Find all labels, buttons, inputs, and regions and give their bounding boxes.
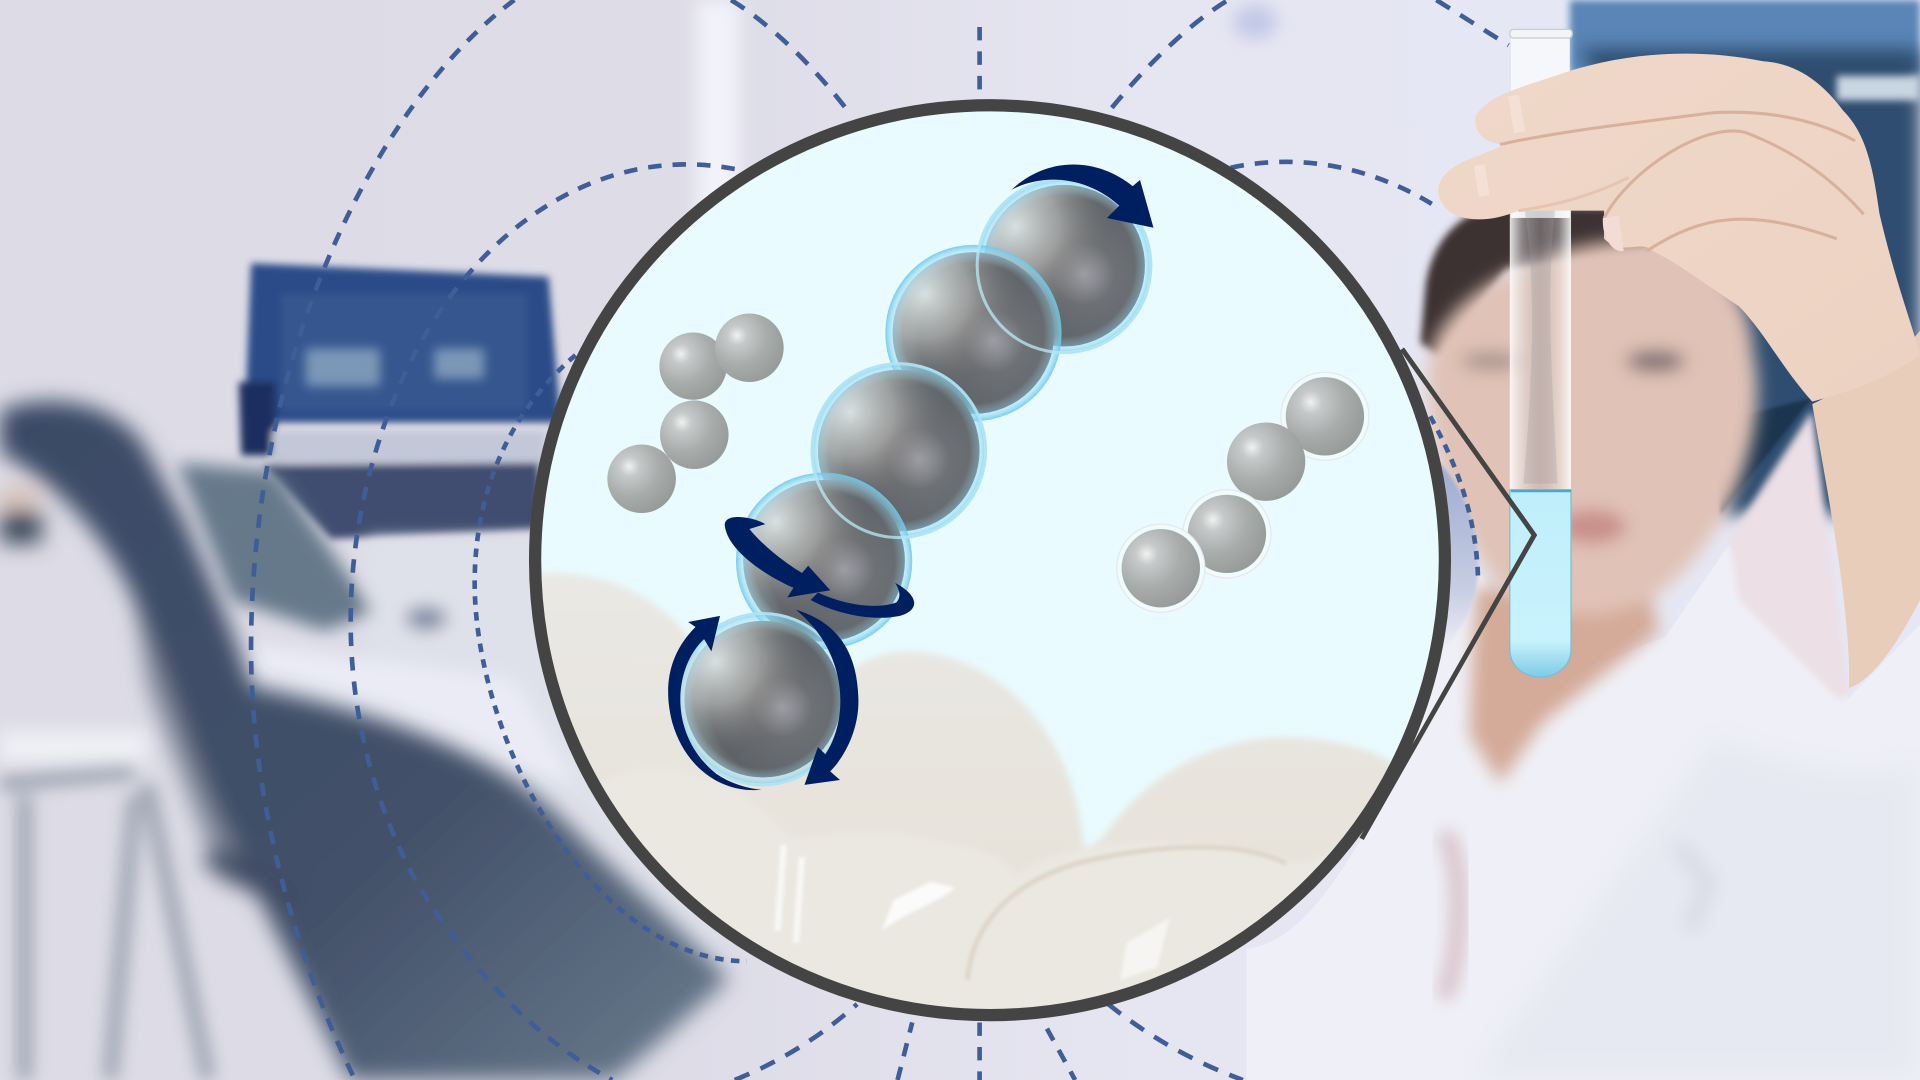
neck [1469, 588, 1659, 784]
rotation arrow around particle 4 [725, 517, 914, 618]
bubble particle 2 [885, 245, 1062, 421]
dental chair [0, 401, 729, 1080]
blurred face [1428, 239, 1758, 615]
chain of bubble-coated particles [676, 178, 1152, 786]
bubble particle 4 [736, 473, 912, 649]
wrist and arm [1812, 331, 1920, 688]
bubble particle 5 [676, 612, 850, 786]
person in lab coat background [1247, 0, 1920, 1080]
hair [1420, 206, 1653, 355]
test tube with blue liquid [1510, 29, 1572, 677]
dental cabinet and counter [178, 463, 722, 980]
dark background patch beside neck [1718, 398, 1812, 514]
callout lines to test tube [1362, 349, 1534, 839]
overlapping bubble rims [677, 179, 1151, 785]
small silver particles right [1117, 372, 1369, 612]
rotation arrow top [1011, 165, 1153, 228]
lab coat [1247, 545, 1920, 1080]
teeth [527, 573, 1396, 1041]
bubble particle 1 [976, 178, 1152, 354]
bubble particle 3 [811, 362, 987, 539]
dashed concentric arcs [251, 0, 1509, 1080]
fingernail [1603, 216, 1624, 251]
small silver particles left [607, 313, 784, 513]
lens ring [535, 105, 1445, 1015]
finger creases [1479, 96, 1864, 251]
bluish gap between lens and face [1427, 453, 1478, 649]
chair stand [0, 747, 208, 1080]
palm and fingers [1438, 54, 1920, 402]
dental monitor [239, 263, 561, 539]
rotation arrows around particle 5 [668, 610, 858, 790]
hand holding test tube [1438, 54, 1920, 688]
magnifier lens [527, 105, 1446, 1041]
